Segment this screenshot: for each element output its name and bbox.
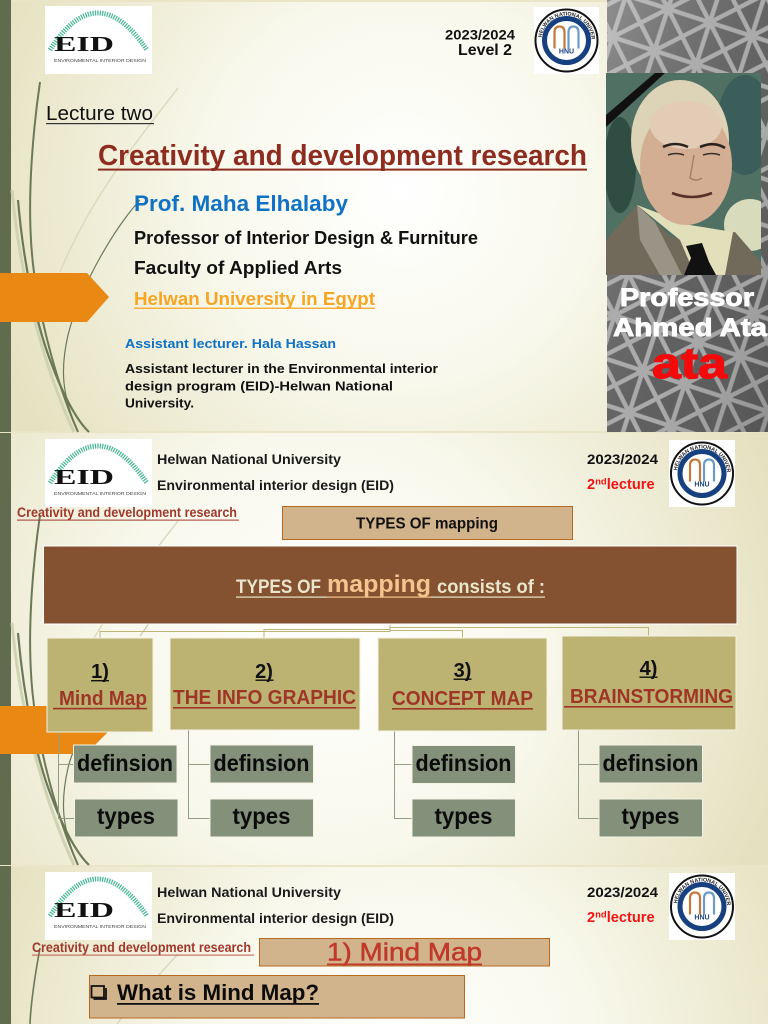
main title: Creativity and development research [98,140,587,172]
lecture label: Lecture two [46,103,153,125]
EID logo slide 3 [45,872,152,940]
sub item: definsion 4: definsion [602,750,698,776]
header text slide 2 [157,452,394,493]
university: Helwan University in Egypt [134,289,375,309]
assistant lecturer name: Assistant lecturer. Hala Hassan [125,336,336,351]
EID logo slide 2 [45,439,152,507]
slide 1 background [0,0,768,433]
course title slide 2: Creativity and development research [17,504,237,520]
section heading box [282,506,572,540]
sub item: types 2 [210,799,314,837]
question box [90,976,464,1018]
header text slide 2: Helwan National University [157,452,342,467]
slide 2 background [0,433,768,866]
year and lecture slide 2: 2023/2024 [587,452,659,467]
category 2: the info graphic: 2) [255,661,273,683]
assistant lecturer description: design program (EID)-Helwan National [125,378,393,394]
professor name: Prof. Maha Elhalaby [134,191,349,216]
left green bar [0,0,11,1024]
category 3: concept map [378,638,547,731]
category 2: the info graphic [170,638,360,730]
slide 3 background [0,866,768,1024]
checkbox bullet [92,986,106,999]
sub item: definsion 4 [599,745,702,783]
HNU logo slide 3: HELWAN NATIONAL UNIVERSITY [674,878,731,906]
orange arrow slide 2 [0,706,108,754]
portrait photo [604,73,768,275]
category 4: brainstorming: 4) [640,658,657,680]
EID logo slide 3: ENVIRONMENTAL INTERIOR DESIGN [54,924,146,929]
question box: What is Mind Map? [117,980,319,1005]
header text slide 3: Environmental interior design (EID) [157,911,394,926]
category 1: mind map [47,638,153,732]
HNU logo slide 2: HNU [694,482,710,488]
brown banner: mapping [327,571,431,598]
year and lecture slide 3: 2023/2024 [587,885,659,900]
sub item: types 3: types [434,803,492,829]
sub item: types 4 [599,799,702,837]
sub item: definsion 2 [210,745,314,783]
professor title: Professor of Interior Design & Furniture [134,228,478,248]
decorative grass slide 3 [30,948,178,1024]
category 1: mind map: Mind Map [59,688,147,710]
year and lecture slide 3: 2 [587,910,595,926]
year and lecture slide 2: lecture [607,477,655,493]
category 3: concept map: CONCEPT MAP [392,688,533,710]
course title slide 3: Creativity and development research [32,939,251,955]
EID logo slide 1: EID [54,32,114,56]
year and lecture slide 2: 2 [587,477,595,493]
assistant lecturer description [125,361,438,410]
HNU logo slide 1 [534,7,599,74]
year and lecture slide 2 [587,452,659,493]
HNU logo slide 3 [669,873,735,940]
year and lecture slide 3 [587,885,659,926]
assistant lecturer description: Assistant lecturer in the Environmental interior [125,361,438,376]
red overlay word: ata [652,339,728,388]
category 1: mind map: 1) [91,661,109,683]
sub item: types 2: types [232,803,290,829]
sub item: types 1: types [97,803,155,829]
brown banner: TYPES OF [236,577,321,598]
HNU logo slide 2: HELWAN NATIONAL UNIVERSITY [674,444,731,472]
section heading: mind map [260,938,550,966]
sub item: definsion 2: definsion [214,750,310,776]
HNU logo slide 3: HNU [694,914,710,922]
header text slide 3: Helwan National University [157,885,342,900]
faculty: Faculty of Applied Arts [134,258,342,278]
assistant lecturer description: University. [125,396,194,410]
EID logo slide 2: ENVIRONMENTAL INTERIOR DESIGN [54,491,146,496]
category 2: the info graphic: THE INFO GRAPHIC [173,687,356,709]
connectors categories to sub items [58,730,599,818]
brown banner: consists of : [437,577,545,598]
professor name overlay: Ahmed Ata [613,314,768,342]
connectors from banner to categories [100,625,648,638]
memorial panel [604,0,768,432]
sub item: types 1 [74,799,178,837]
professor name overlay [613,284,768,342]
year and level: Level 2 [458,42,512,59]
sub item: types 4: types [622,803,680,829]
orange arrow slide 1 [0,273,109,322]
category 3: concept map: 3) [454,660,471,682]
sub item: definsion 3 [412,746,516,784]
sub item: definsion 3: definsion [416,750,512,776]
sub item: definsion 1: definsion [77,750,173,776]
EID logo slide 3: EID [54,898,114,922]
year and level [445,28,516,59]
HNU logo slide 1: HELWAN NATIONAL UNIVERSITY [538,12,596,40]
sub item: definsion 1 [74,745,177,783]
section heading box: TYPES OF mapping [356,516,498,532]
header text slide 3 [157,885,394,926]
year and lecture slide 3: nd [595,910,607,920]
HNU logo slide 2 [669,440,735,507]
decorative grass slide 2 [12,515,178,865]
section heading: mind map: 1) Mind Map [327,938,482,966]
decorative grass slide 1 [12,82,178,432]
EID logo slide 1: ENVIRONMENTAL INTERIOR DESIGN [54,58,146,63]
year and lecture slide 3: lecture [607,910,655,926]
EID logo slide 2: EID [54,465,114,489]
HNU logo slide 1: HNU [559,48,574,56]
year and lecture slide 2: nd [595,476,607,488]
sub item: types 3 [412,799,516,837]
brown banner [44,546,737,624]
category 4: brainstorming: BRAINSTORMING [570,686,733,708]
header text slide 2: Environmental interior design (EID) [157,478,394,493]
lattice background [607,0,768,432]
professor name overlay: Professor [620,284,754,312]
year and level: 2023/2024 [445,28,516,42]
category 4: brainstorming [562,636,736,730]
EID logo slide 1 [45,6,152,74]
